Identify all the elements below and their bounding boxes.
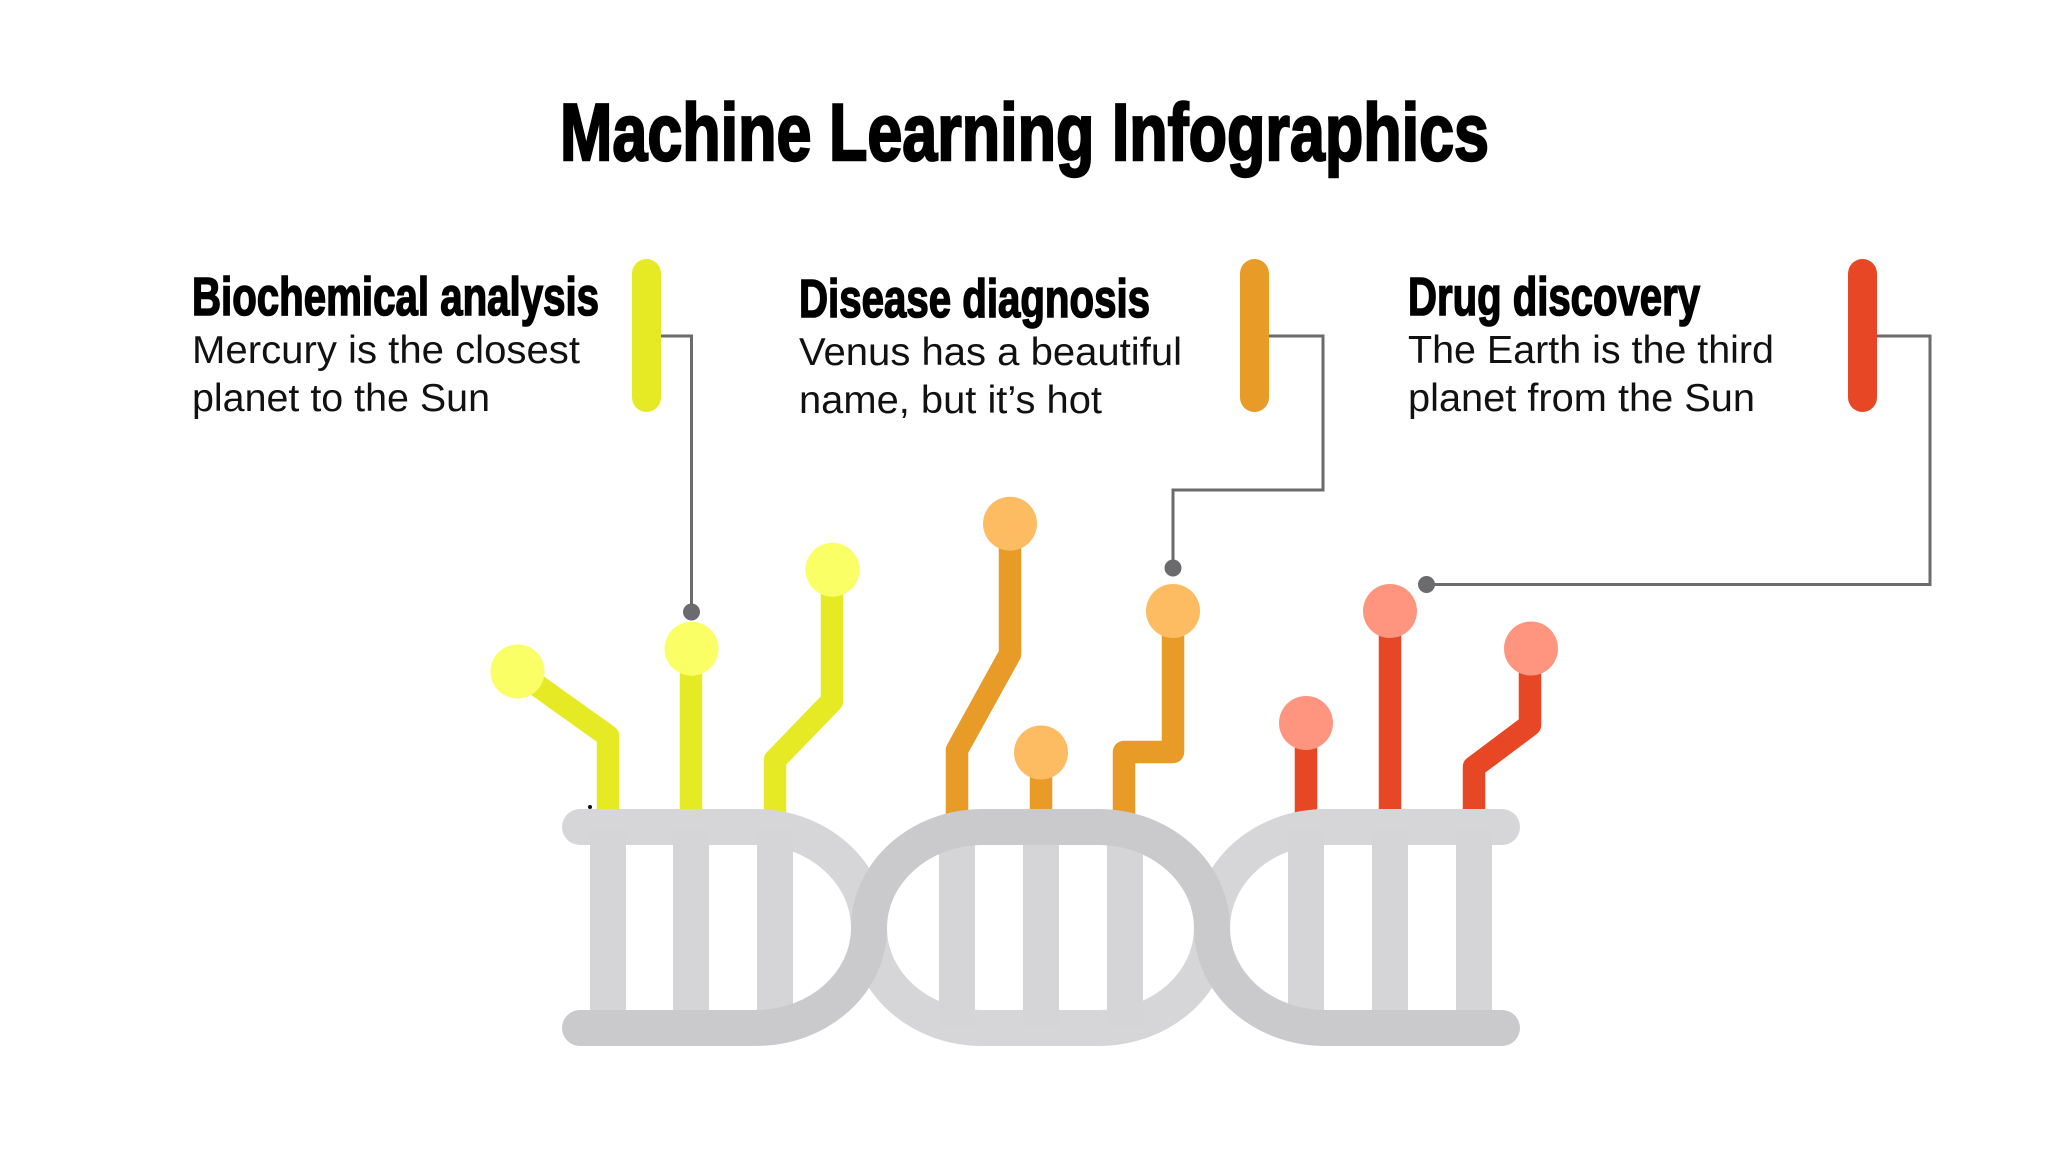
orange heads: [983, 497, 1200, 780]
text block: mercury description: planet to the Sun: [192, 377, 490, 420]
text block: earth description: planet from the Sun: [1408, 377, 1755, 420]
small black speck: [588, 805, 592, 809]
red stem 2: [1379, 610, 1401, 830]
heading: biochemical analysis: Biochemical analysis: [192, 267, 599, 327]
text block: venus description: Venus has a beautiful: [799, 331, 1182, 374]
yellow stem 3: [775, 569, 832, 830]
heading: disease diagnosis: Disease diagnosis: [799, 269, 1150, 329]
red stem 1: [1295, 723, 1317, 830]
connector: drug discovery: [1418, 336, 1930, 593]
text block: venus description: [799, 331, 1182, 422]
yellow stem 2: [680, 648, 702, 830]
text block: earth description: [1408, 329, 1774, 420]
dark strand: [580, 827, 1502, 1028]
text block: earth description: The Earth is the third: [1408, 329, 1774, 372]
red heads: [1279, 584, 1558, 750]
heading: drug discovery: Drug discovery: [1408, 267, 1700, 327]
text block: mercury description: [192, 329, 580, 420]
connector: biochemical analysis: [661, 336, 700, 620]
text block: venus description: name, but it’s hot: [799, 379, 1102, 422]
orange stem 1: [957, 523, 1010, 830]
red stem 3: [1474, 648, 1530, 830]
orange stem 2: [1030, 752, 1052, 830]
connector: disease diagnosis: [1164, 336, 1323, 576]
panel: drug discovery: [1408, 259, 1877, 420]
orange lollipops: [957, 497, 1200, 830]
panel: biochemical analysis: [192, 259, 661, 420]
panel: disease diagnosis: [799, 259, 1269, 422]
yellow heads: [490, 543, 860, 698]
DNA helix: [580, 827, 1502, 1028]
yellow stem 1: [517, 671, 608, 830]
light strand: [580, 827, 1502, 1028]
title: Machine Learning Infographics: [560, 88, 1489, 178]
helix rungs: [608, 827, 1474, 1028]
pill marker: red: [1848, 259, 1877, 412]
yellow lollipops: [490, 543, 860, 830]
text block: mercury description: Mercury is the closest: [192, 329, 580, 372]
pill marker: orange: [1240, 259, 1269, 412]
pill marker: yellow: [632, 259, 661, 412]
red lollipops: [1279, 584, 1558, 830]
orange stem 3: [1124, 611, 1173, 830]
